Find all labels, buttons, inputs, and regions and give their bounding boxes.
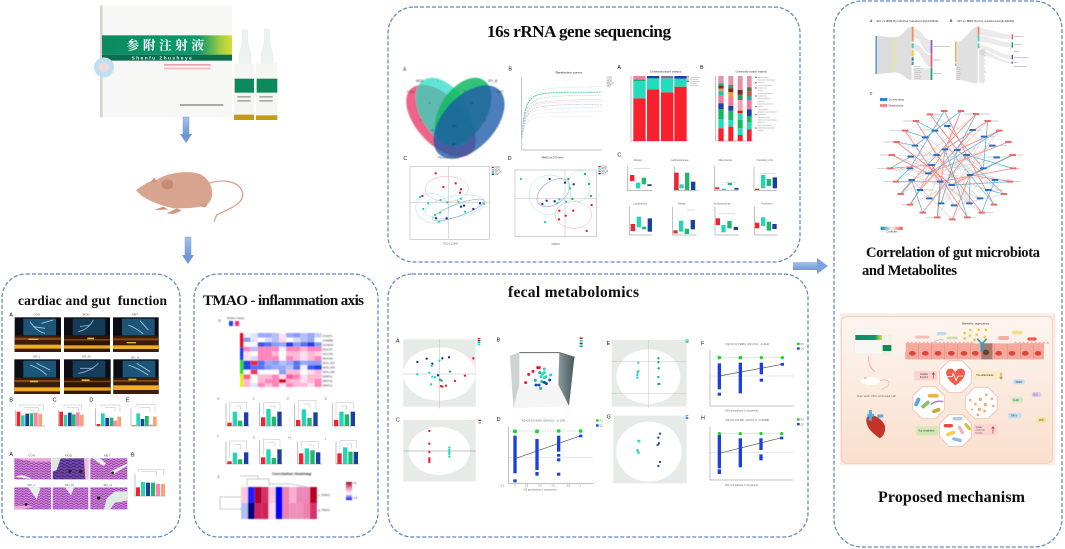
stacked bar chart B genus: Community barplot analysis bbox=[736, 71, 768, 74]
epithelium bbox=[906, 339, 1050, 359]
heading: correlation line two: and Metabolites bbox=[862, 263, 957, 279]
colon histology images: MOD bbox=[65, 454, 73, 458]
biomarker bar charts B to I: I bbox=[325, 437, 326, 441]
network legend: C bbox=[870, 92, 873, 96]
colon histology images bbox=[9, 452, 127, 509]
colour scale bbox=[346, 482, 358, 500]
permutation test plot D: D bbox=[497, 417, 501, 423]
colon histology images: MET bbox=[104, 454, 110, 458]
callouts: producing bbox=[976, 429, 984, 432]
inflammatory marker pills: IL-6 bbox=[1034, 395, 1038, 397]
biomarker bar charts B to I: D bbox=[287, 396, 290, 400]
echocardiography images bbox=[9, 313, 159, 394]
permutation test plot F: R2 bbox=[801, 344, 804, 346]
OPLS-DA score plot G bbox=[607, 414, 688, 483]
correlation heatmap: g_TMAO bbox=[318, 508, 331, 512]
venn diagram: MOD bbox=[416, 79, 424, 83]
gene expression heatmap bbox=[218, 317, 335, 388]
genus box plots C: Lactobacillus bbox=[633, 202, 648, 205]
correlation heatmap: Correlation Heatmap bbox=[272, 471, 312, 476]
permutation test plot D: 0 bbox=[514, 486, 516, 488]
Sankey diagram B bbox=[950, 19, 1028, 83]
NMDS scatter plot D: MET bbox=[601, 173, 607, 175]
NMDS scatter plot D: SFI_M bbox=[601, 171, 608, 173]
callouts: function bbox=[920, 376, 929, 379]
venn counts: 18 bbox=[452, 142, 455, 146]
inflammatory marker pills bbox=[1008, 379, 1046, 423]
permutation test plot D bbox=[497, 417, 603, 492]
mechanism diagram: Rat with ISO-induced HF bbox=[857, 394, 896, 398]
row group colour bar bbox=[240, 333, 244, 387]
inflammatory marker pills: TNF-α bbox=[1010, 416, 1018, 418]
3D score plot B: B bbox=[497, 338, 501, 344]
venn counts: 9 bbox=[420, 118, 422, 122]
heading: 16s rRNA gene sequencing bbox=[487, 22, 672, 41]
PCoA scatter plot C: PC1 (12.28%) bbox=[443, 243, 458, 245]
permutation test plot D: 0.6 bbox=[552, 486, 556, 488]
correlation heatmap bbox=[217, 471, 358, 519]
panel: fecal metabolomics bbox=[388, 274, 808, 537]
injection product bbox=[855, 328, 891, 355]
callouts: SCFAs bbox=[976, 426, 982, 429]
correlation heatmap: p_TMAO bbox=[318, 493, 331, 497]
permutation test plot H: 200 permutations 1 components bbox=[725, 484, 759, 487]
biomarker bar charts B to I: C bbox=[253, 396, 256, 400]
heatmap row labels bbox=[322, 334, 335, 388]
panel: Shenfu injection product photo bbox=[94, 5, 277, 120]
genus box plots C: Akkermansia bbox=[718, 159, 732, 162]
PCoA scatter plot C: MOD bbox=[495, 169, 500, 171]
inflammatory marker pills: IL-1β bbox=[1013, 400, 1019, 402]
text: Shenfu injection: Shenfu injection bbox=[962, 321, 990, 325]
octagon: metabolites right bbox=[965, 387, 997, 419]
NMDS scatter plot D: MOD bbox=[601, 169, 607, 171]
venn diagram: CON bbox=[407, 90, 415, 94]
correlation network C bbox=[877, 110, 1023, 220]
rarefaction curves: Rarefaction curves bbox=[556, 70, 583, 74]
network legend: Metabolomics bbox=[889, 105, 904, 108]
heading: cardiac and gut function bbox=[18, 293, 167, 308]
rarefaction curves: SFI_M bbox=[607, 83, 614, 85]
callouts: Pro-inflammation bbox=[976, 374, 995, 377]
heatmap row labels: MMT10 bbox=[322, 379, 333, 383]
carton box: Shenfu Zhusheye bbox=[132, 55, 192, 60]
permutation test plot F: R2=(0.0,0.966), Q2=(0.0, -0.212) bbox=[726, 342, 769, 346]
PCoA scatter plot C: MET bbox=[495, 174, 500, 176]
arrow: sequencing to correlation bbox=[793, 258, 828, 274]
Sankey diagram B: B bbox=[950, 19, 953, 23]
icon: rat bbox=[136, 172, 243, 222]
octagon: SCFA bacteria bbox=[940, 414, 972, 446]
rarefaction curves: B bbox=[508, 67, 512, 73]
heatmap row labels: SFI3_M4 bbox=[322, 366, 335, 370]
biomarker bar charts B to I: E bbox=[325, 396, 327, 400]
genus box plots C: Blautia bbox=[678, 202, 686, 205]
echocardiography images: MOD bbox=[83, 313, 90, 317]
Sankey diagram A: SFI vs MOD Pyrimidine metabolism(ko00240) bbox=[877, 20, 939, 23]
permutation test plot D: R2 bbox=[600, 421, 603, 423]
genus box plots C: Clostridia_UCG bbox=[757, 159, 773, 162]
heatmap cells bbox=[244, 333, 322, 387]
NMDS scatter plot D: NMDS on OTU level bbox=[542, 157, 564, 159]
cardiac function bar charts B to E bbox=[9, 398, 157, 426]
permutation test plot F: Q2 bbox=[801, 349, 804, 351]
venn counts: 4 bbox=[429, 101, 431, 105]
stacked bar chart A phylum: Community barplot analysis bbox=[650, 71, 682, 74]
venn diagram bbox=[393, 67, 518, 172]
permutation test plot F: 200 permutations 1 components bbox=[725, 410, 759, 413]
biomarker bar charts B to I: H bbox=[288, 435, 290, 439]
permutation test plot F: F bbox=[701, 341, 705, 347]
PCoA scatter plot C: PCoA on OTU level bbox=[438, 156, 460, 159]
rarefaction curves: MET bbox=[607, 86, 612, 88]
echocardiography images: SFI_M bbox=[82, 354, 91, 358]
callouts: Cardiac bbox=[920, 373, 929, 376]
stacked bar chart B genus bbox=[700, 65, 777, 141]
gene expression heatmap: A bbox=[218, 318, 221, 323]
heatmap row labels: SFI1_M1 bbox=[322, 361, 335, 365]
histology score bar chart: B bbox=[131, 453, 135, 459]
arrow: rat to experiments bbox=[182, 237, 194, 264]
permutation test plot H: R2=(0.0,0.98), Q2=(0.0, -0.0088) bbox=[726, 418, 769, 422]
heatmap row labels: MUC5A bbox=[322, 352, 333, 356]
colour scale: -0.8 bbox=[353, 497, 358, 500]
venn counts: 7 bbox=[437, 79, 439, 83]
octagon: gut bacteria left bbox=[913, 387, 945, 419]
heading: correlation: Correlation of gut microbiota bbox=[866, 245, 1041, 261]
OPLS-DA score plot E: E bbox=[607, 341, 611, 347]
cardiac function bar charts B to E: D bbox=[89, 398, 93, 404]
cardiac function bar charts B to E: C bbox=[53, 398, 57, 404]
biomarker bar charts B to I: B bbox=[217, 396, 219, 400]
genus box plots C: Alistipes bbox=[633, 159, 643, 162]
heading: TMAO - inflammation axis bbox=[203, 293, 364, 309]
genus box plots C bbox=[617, 153, 778, 235]
Sankey diagram B: SFI vs MOD Purine metabolism(ko00230) bbox=[957, 20, 1014, 23]
correlation cells bbox=[241, 487, 317, 519]
rarefaction curves bbox=[508, 67, 614, 150]
OPLS-DA score plot C bbox=[396, 418, 481, 482]
stacked bar chart A phylum bbox=[617, 65, 700, 141]
heatmap legend: Relative change bbox=[227, 317, 245, 320]
genus box plots C: Oscillospiraceae bbox=[713, 202, 731, 205]
octagon: heart bbox=[940, 361, 971, 393]
coefficient colour bar bbox=[881, 227, 903, 234]
venn diagram: MET bbox=[497, 90, 504, 94]
heading: proposed mechanism: Proposed mechanism bbox=[878, 489, 1026, 506]
PCoA scatter plot C bbox=[403, 156, 502, 245]
heatmap row labels: MUC6A bbox=[322, 356, 333, 360]
OPLS-DA score plot C: C bbox=[396, 418, 400, 424]
NMDS scatter plot D: NMDS1 bbox=[552, 244, 561, 246]
genus box plots C: Lachnospiraceae bbox=[671, 159, 689, 162]
vials bbox=[234, 29, 277, 120]
rarefaction curves: MOD bbox=[607, 80, 612, 82]
venn diagram: A bbox=[403, 67, 407, 73]
outer metabolite nodes bbox=[887, 110, 1017, 220]
permutation test plot D: -0.2 bbox=[500, 486, 505, 488]
genus box plots C: Roseburia bbox=[762, 202, 773, 205]
permutation test plot H bbox=[701, 415, 804, 487]
network legend: Gut microbiota bbox=[889, 99, 905, 102]
arrow: product to rat bbox=[180, 117, 192, 143]
permutation test plot D: Q2 bbox=[600, 426, 603, 428]
echocardiography images: MET bbox=[132, 313, 138, 317]
cardiac function bar charts B to E: B bbox=[9, 398, 13, 404]
OPLS-DA score plot G: G bbox=[607, 414, 611, 420]
callouts bbox=[914, 370, 1003, 435]
heatmap row labels: MMT11 bbox=[322, 384, 333, 388]
venn counts: 6 bbox=[464, 89, 466, 93]
coefficient colour bar: Coefficient bbox=[887, 231, 898, 234]
inflammatory marker pills: LPS bbox=[1039, 420, 1044, 422]
OPLS-DA score plot A bbox=[396, 338, 480, 408]
carton box: 参附注射液 bbox=[127, 37, 204, 52]
panel: TMAO - inflammation axis bbox=[194, 274, 378, 537]
permutation test plot D: 1 bbox=[580, 486, 582, 488]
panel: 16s rRNA gene sequencing bbox=[388, 7, 800, 262]
heatmap row labels: GOMB2 bbox=[322, 338, 334, 342]
dots and microbes in lumen bbox=[915, 328, 1037, 343]
biomarker bar charts B to I: F bbox=[217, 434, 219, 438]
genus box plots C: C bbox=[617, 153, 621, 159]
NMDS scatter plot D: CON bbox=[601, 166, 607, 168]
permutation test plot D: 200 permutations 1 components bbox=[523, 489, 557, 492]
echocardiography images: SFI_L bbox=[33, 354, 41, 358]
heatmap row labels: SFI3_M6 bbox=[322, 370, 335, 374]
PCoA scatter plot C: C bbox=[403, 156, 407, 162]
stacked bar chart B genus: B bbox=[700, 65, 704, 71]
colon histology images: SFI_L bbox=[27, 483, 36, 487]
NMDS scatter plot D bbox=[508, 156, 608, 246]
callouts: bacteria bbox=[976, 431, 984, 434]
heatmap row labels: MMP11 bbox=[322, 374, 333, 378]
Sankey diagram A: A bbox=[870, 19, 873, 23]
heatmap row labels: MUC5T bbox=[322, 348, 333, 352]
heading: fecal metabolomics bbox=[508, 284, 639, 301]
colon histology images: CON bbox=[28, 454, 35, 458]
biomarker bar charts B to I: G bbox=[253, 435, 256, 439]
node label strips bbox=[877, 114, 1023, 217]
network legend bbox=[870, 92, 905, 108]
venn diagram: SFI_M bbox=[488, 79, 498, 83]
OPLS-DA score plot E bbox=[607, 339, 689, 408]
rat bbox=[861, 377, 889, 390]
colon histology images: SFI_M bbox=[65, 483, 74, 487]
colon histology images: A bbox=[9, 452, 13, 458]
permutation test plot D: 0.2 bbox=[525, 486, 529, 488]
venn counts: 8 bbox=[484, 118, 486, 122]
NMDS scatter plot D: D bbox=[508, 156, 512, 162]
biomarker bar charts B to I bbox=[217, 396, 359, 464]
venn counts bbox=[420, 79, 486, 146]
network edges bbox=[890, 111, 1013, 219]
echocardiography images: A bbox=[9, 313, 13, 319]
dendrograms bbox=[220, 476, 307, 509]
permutation test plot F bbox=[701, 341, 804, 413]
venn counts: 356 bbox=[452, 124, 457, 128]
heatmap row labels: GOAT1 bbox=[322, 334, 333, 338]
colour scale: 0.8 bbox=[353, 482, 357, 485]
PCoA scatter plot C: CON bbox=[495, 167, 500, 169]
mechanism diagram bbox=[840, 313, 1055, 465]
callouts: Gut metabolism bbox=[918, 430, 935, 433]
venn counts: 12 bbox=[431, 128, 434, 132]
rarefaction curves: CON bbox=[607, 78, 612, 80]
permutation test plot D: R2=(0.0,0.969), Q2=(0.0, -0.133) bbox=[522, 419, 565, 423]
echocardiography images: CON bbox=[33, 313, 40, 317]
PCoA scatter plot C: SFI_M bbox=[495, 172, 502, 174]
carton box bbox=[94, 5, 232, 117]
panel: cardiac and gut function bbox=[2, 274, 180, 537]
permutation test plot D: 0.8 bbox=[567, 486, 571, 488]
echocardiography images: SFI_H bbox=[131, 355, 139, 359]
Sankey diagram A bbox=[870, 19, 950, 80]
OPLS-DA score plot A: A bbox=[396, 339, 400, 345]
stacked bar chart A phylum: A bbox=[617, 65, 621, 71]
cardiac function bar charts B to E: E bbox=[126, 398, 130, 404]
permutation test plot D: 0.4 bbox=[538, 486, 542, 488]
permutation test plot H: R2 bbox=[801, 420, 804, 422]
icon: anatomical heart bbox=[866, 410, 885, 438]
panel: correlation and mechanism bbox=[834, 1, 1062, 547]
permutation test plot H: H bbox=[701, 415, 705, 421]
colon histology images: SFI_H bbox=[103, 483, 112, 487]
venn counts: 31 bbox=[470, 101, 473, 105]
histology score bar chart bbox=[131, 453, 166, 496]
3D score plot B bbox=[497, 337, 583, 408]
permutation test plot H: Q2 bbox=[801, 424, 804, 426]
heatmap row labels: GOSM3 bbox=[322, 343, 334, 347]
inflammatory marker pills: TMAO bbox=[1015, 381, 1022, 384]
inner microbiota nodes bbox=[907, 125, 1000, 206]
correlation heatmap: J bbox=[217, 474, 219, 479]
